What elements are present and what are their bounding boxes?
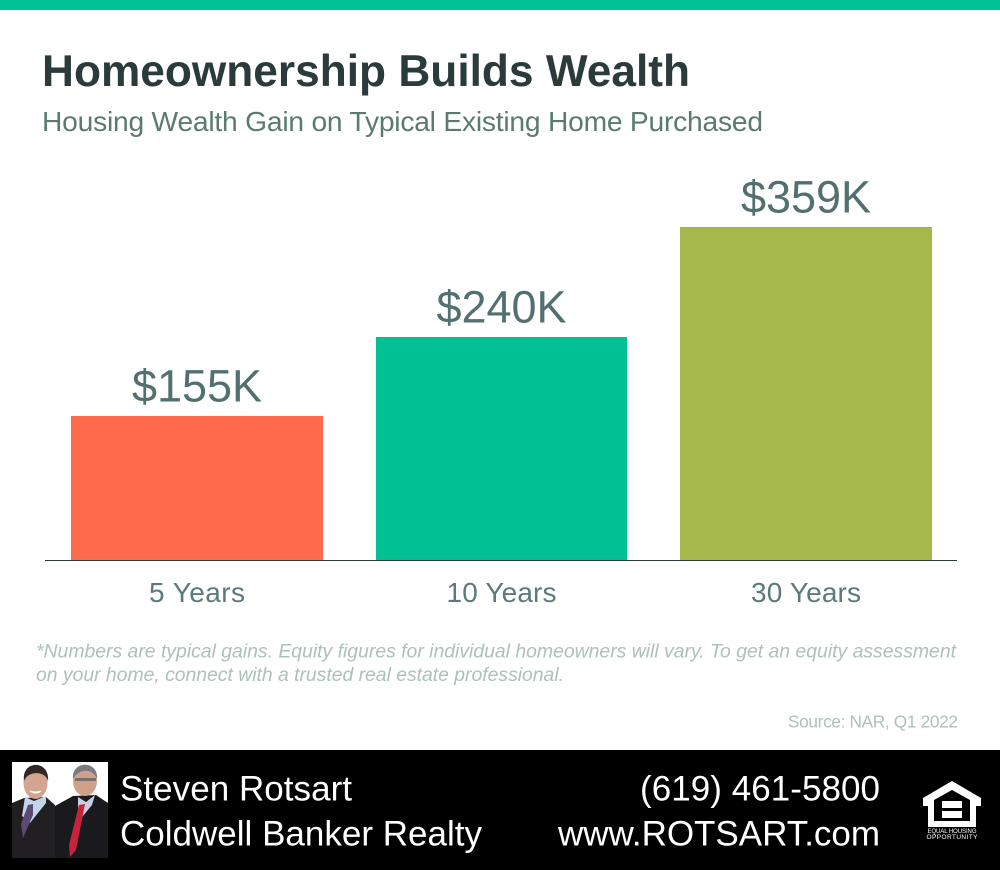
left tie [21, 804, 33, 838]
icon: equal housing opportunity [923, 781, 981, 841]
source: Source: NAR, Q1 2022 [788, 712, 958, 732]
bar: 10 years [376, 337, 627, 560]
left shirt [22, 796, 46, 823]
footnote: *Numbers are typical gains. Equity figures for individual homeowners will vary. To get an equity assessment [36, 640, 958, 662]
bar chart [45, 172, 957, 608]
left man suit [12, 797, 58, 858]
right shirt [78, 795, 95, 822]
bar: 5 years [71, 416, 323, 560]
website: www.ROTSART.com [557, 814, 880, 854]
icon: equal housing opportunity: OPPORTUNITY [926, 834, 978, 841]
right tie [69, 804, 85, 857]
icon: equal housing opportunity: EQUAL HOUSING [928, 829, 977, 835]
left face [24, 767, 48, 799]
axis label: 30 years: 30 Years [751, 577, 861, 608]
title: Homeownership Builds Wealth [42, 47, 690, 96]
axis label: 5 years: 5 Years [149, 577, 245, 608]
value label: 30 years: $359K [741, 172, 871, 222]
value label: 10 years: $240K [436, 282, 566, 332]
axis label: 10 years: 10 Years [446, 577, 556, 608]
baseline [45, 560, 957, 561]
phone: (619) 461-5800 [640, 770, 880, 808]
value label: 5 years: $155K [132, 360, 262, 412]
right man suit [55, 795, 108, 858]
footer band [0, 750, 1000, 870]
brokerage: Coldwell Banker Realty [120, 814, 482, 854]
footnote: on your home, connect with a trusted real estate professional. [36, 664, 564, 686]
footnote [36, 640, 958, 686]
bar: 30 years [680, 227, 932, 560]
agent photo [12, 762, 108, 858]
agent name: Steven Rotsart [120, 770, 352, 808]
subtitle: Housing Wealth Gain on Typical Existing Home Purchased [42, 105, 763, 137]
right face [73, 766, 97, 796]
